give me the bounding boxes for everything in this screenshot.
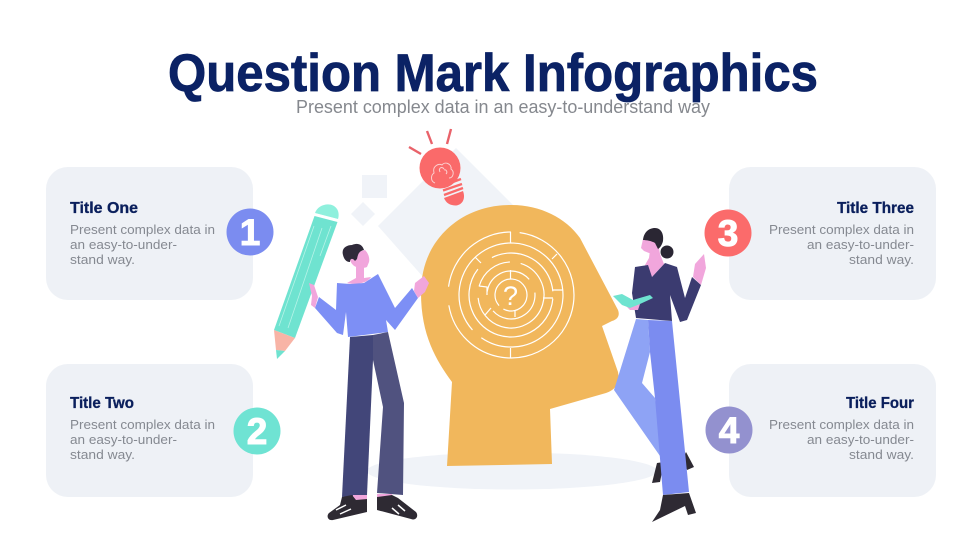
description <box>70 222 215 267</box>
open book <box>613 294 653 308</box>
card background <box>729 364 936 497</box>
bulb base <box>442 179 463 195</box>
number badge: 3 <box>718 213 738 254</box>
man hair <box>343 244 364 262</box>
brain doodle <box>432 163 453 183</box>
woman figure <box>613 228 706 522</box>
bulb glass <box>420 148 460 188</box>
man shoes <box>328 495 417 520</box>
description <box>769 222 914 267</box>
description: an easy-to-under- <box>807 237 914 252</box>
title: Question Mark Infographics <box>168 44 818 103</box>
woman hair <box>643 228 663 249</box>
number badge <box>226 208 274 256</box>
description: Present complex data in <box>70 222 215 237</box>
description: an easy-to-under- <box>70 237 177 252</box>
pencil wood <box>274 330 295 351</box>
woman back shoe <box>652 452 694 483</box>
bulb rays <box>409 129 451 154</box>
head silhouette with maze <box>421 205 619 466</box>
question mark: ? <box>503 281 518 311</box>
description: Present complex data in <box>769 222 914 237</box>
man socks <box>353 494 392 500</box>
description <box>70 417 215 462</box>
woman neck and chest <box>645 248 664 277</box>
man figure <box>309 244 429 520</box>
card background <box>729 167 936 300</box>
woman front leg <box>648 320 689 495</box>
description <box>769 417 914 462</box>
number badge <box>706 406 752 454</box>
description: Present complex data in <box>70 417 215 432</box>
description: stand way. <box>849 447 914 462</box>
heading: Title Three <box>837 200 914 217</box>
card background <box>46 364 253 497</box>
woman top <box>632 263 701 322</box>
head shape <box>421 205 619 466</box>
pencil tip <box>276 350 285 359</box>
man left leg <box>342 335 373 497</box>
man right leg <box>373 332 404 495</box>
description: stand way. <box>849 252 914 267</box>
panel: title three <box>704 167 936 300</box>
heading: Title Four <box>846 395 914 412</box>
pencil eraser <box>315 204 339 219</box>
man face <box>350 250 369 268</box>
panel: title four <box>706 364 936 497</box>
icon: pencil <box>274 204 339 359</box>
woman bun <box>660 246 674 258</box>
subtitle: Present complex data in an easy-to-understand way <box>296 97 710 117</box>
description: stand way. <box>70 252 135 267</box>
description: an easy-to-under- <box>70 432 177 447</box>
woman back leg <box>614 319 662 456</box>
background decorative shapes <box>351 148 657 490</box>
description: Present complex data in <box>769 417 914 432</box>
description: stand way. <box>70 447 135 462</box>
heading: Title Two <box>70 395 134 412</box>
number badge: 2 <box>247 411 267 452</box>
shoe laces <box>336 505 405 514</box>
man neck <box>347 262 371 284</box>
maze <box>438 222 584 368</box>
woman raised hand <box>693 254 706 285</box>
number badge <box>234 408 280 454</box>
woman face <box>641 239 659 253</box>
panel: title one <box>46 167 274 300</box>
man hands <box>414 276 429 298</box>
pencil body <box>274 216 338 338</box>
card background <box>46 167 253 300</box>
man shirt <box>315 274 418 337</box>
woman hand under book <box>625 304 640 310</box>
number badge <box>704 210 752 256</box>
panel: title two <box>46 364 280 497</box>
woman front shoe <box>652 493 696 522</box>
heading: Title One <box>70 200 138 217</box>
description: an easy-to-under- <box>807 432 914 447</box>
pencil highlights <box>279 226 331 328</box>
icon: light bulb <box>409 129 464 206</box>
number badge: 4 <box>719 410 740 451</box>
number badge: 1 <box>240 212 260 253</box>
pencil band <box>315 214 338 220</box>
